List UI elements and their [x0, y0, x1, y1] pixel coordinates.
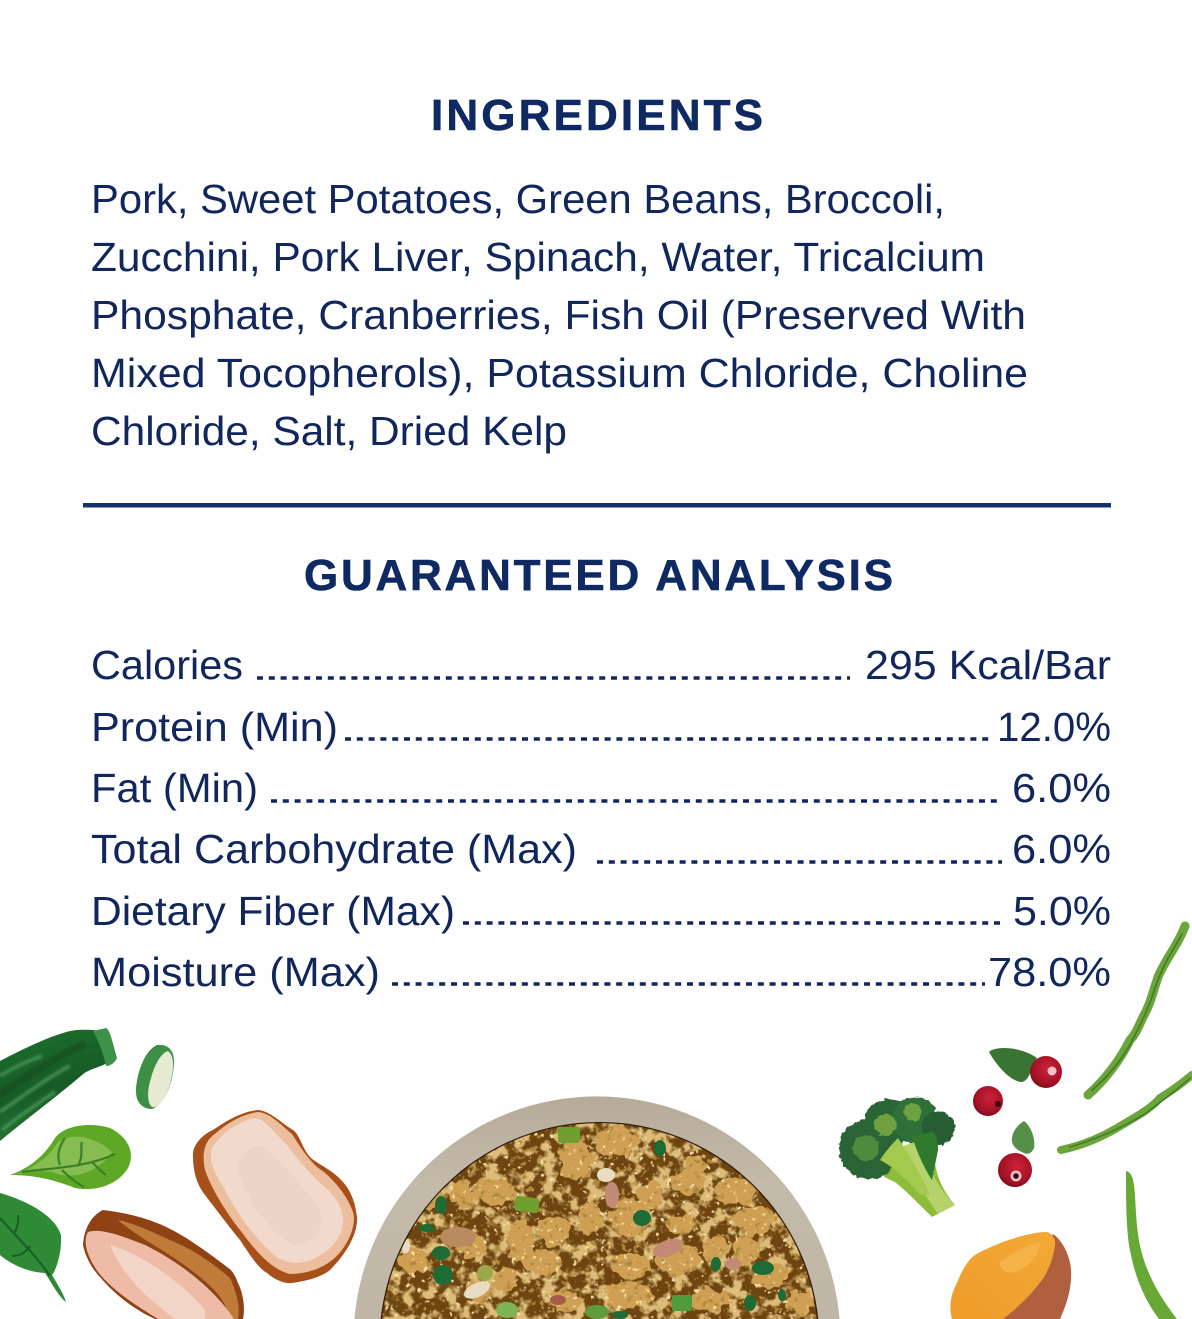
- cranberry: [973, 1086, 1003, 1116]
- table: guaranteed analysis values: [91, 642, 1111, 995]
- row: dietary fiber: Dietary Fiber (Max): [91, 888, 455, 934]
- text block: ingredient list: [91, 176, 1028, 454]
- row: total carbohydrate: 6.0%: [1012, 826, 1111, 872]
- illustration: bowl of food: [354, 1096, 840, 1319]
- row: total carbohydrate: [91, 826, 1111, 872]
- row: calories: [91, 642, 1111, 688]
- row: dietary fiber: [91, 888, 1111, 934]
- row: calories: 295 Kcal/Bar: [865, 642, 1111, 688]
- row: fat: 6.0%: [1012, 765, 1111, 811]
- row: fat: [91, 765, 1111, 811]
- illustration: sweet potato: [950, 1232, 1071, 1319]
- heading: ingredients: INGREDIENTS: [431, 91, 763, 140]
- illustration: spinach leaf: [10, 1125, 131, 1189]
- row: moisture: 78.0%: [988, 949, 1111, 995]
- heading: guaranteed analysis: GUARANTEED ANALYSIS: [304, 551, 893, 600]
- row: moisture: Moisture (Max): [91, 949, 380, 995]
- text block: ingredient list: Mixed Tocopherols), Potassium Chloride, Choline: [91, 350, 1028, 396]
- illustration: broccoli: [839, 1097, 955, 1217]
- cranberry: [998, 1153, 1032, 1187]
- illustration: green bean middle: [1061, 1075, 1192, 1150]
- row: moisture: [91, 949, 1111, 995]
- row: protein: 12.0%: [997, 704, 1111, 750]
- illustration: zucchini slice: [136, 1045, 174, 1109]
- row: protein: Protein (Min): [91, 704, 338, 750]
- leaf: [1012, 1121, 1034, 1154]
- bowl rim: [354, 1096, 840, 1319]
- food: [380, 1120, 820, 1319]
- leaf: [989, 1048, 1037, 1082]
- illustration: spinach leaf dark: [0, 1193, 66, 1302]
- illustration: green bean lower: [1126, 1171, 1177, 1319]
- cranberry: [1030, 1056, 1062, 1088]
- row: fat: Fat (Min): [91, 765, 258, 811]
- illustration: cranberries and leaves: [973, 1048, 1062, 1187]
- text block: ingredient list: Chloride, Salt, Dried Kelp: [91, 408, 567, 454]
- illustration: pork slice right: [193, 1110, 357, 1283]
- row: calories: Calories: [91, 642, 243, 688]
- row: dietary fiber: 5.0%: [1013, 888, 1111, 934]
- illustration: zucchini: [0, 1028, 117, 1141]
- row: protein: [91, 704, 1111, 750]
- row: total carbohydrate: Total Carbohydrate (Max): [91, 826, 577, 872]
- text block: ingredient list: Phosphate, Cranberries, Fish Oil (Preserved With: [91, 292, 1026, 338]
- text block: ingredient list: Zucchini, Pork Liver, Spinach, Water, Tricalcium: [91, 234, 985, 280]
- illustration: green bean upper: [1088, 926, 1185, 1095]
- text block: ingredient list: Pork, Sweet Potatoes, Green Beans, Broccoli,: [91, 176, 945, 222]
- illustration: pork slice left: [83, 1210, 244, 1319]
